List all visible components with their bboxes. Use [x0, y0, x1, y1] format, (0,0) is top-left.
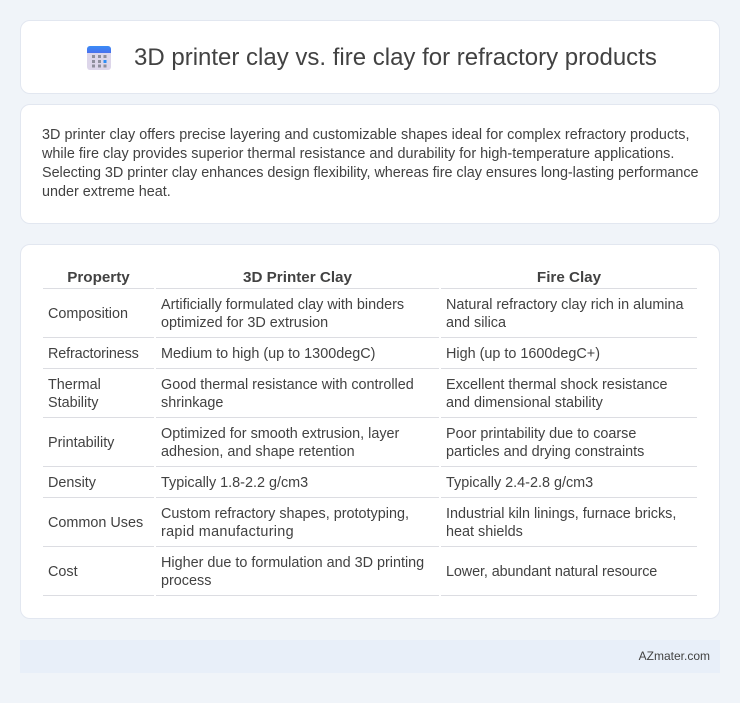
row: thermal stability: shrinkage: [161, 395, 223, 411]
row: common uses: [43, 506, 697, 547]
row: thermal stability: Good thermal resistance with controlled: [161, 377, 414, 393]
row: common uses: Custom refractory shapes, prototyping,: [161, 506, 409, 522]
row: composition: Natural refractory clay rich in alumina: [446, 297, 684, 313]
table header: 3D Printer Clay: [243, 269, 352, 286]
row: common uses: Common Uses: [48, 515, 143, 531]
row: refractoriness: Medium to high (up to 1300degC): [161, 346, 375, 362]
row: thermal stability: [43, 377, 697, 418]
row: composition: Composition: [48, 306, 128, 322]
row: common uses: heat shields: [446, 524, 523, 540]
row: thermal stability: Thermal: [48, 377, 101, 393]
table header: Property: [67, 269, 130, 286]
row: cost: Cost: [48, 564, 78, 580]
row: density: Typically 1.8-2.2 g/cm3: [161, 475, 308, 491]
row: thermal stability: Excellent thermal shock resistance: [446, 377, 668, 393]
row: composition: Artificially formulated clay with binders: [161, 297, 404, 313]
row: printability: Optimized for smooth extrusion, layer: [161, 426, 399, 442]
row: density: Typically 2.4-2.8 g/cm3: [446, 475, 593, 491]
row: printability: [43, 426, 697, 467]
icon: calendar: [87, 46, 111, 70]
row: composition: optimized for 3D extrusion: [161, 315, 328, 331]
intro panel: [20, 104, 720, 224]
row: density: [43, 475, 697, 498]
row: refractoriness: High (up to 1600degC+): [446, 346, 600, 362]
row: cost: Higher due to formulation and 3D printing: [161, 555, 424, 571]
intro text: 3D printer clay offers precise layering and customizable shapes ideal for complex refractory products,: [42, 127, 689, 143]
table header: [43, 269, 697, 289]
comparison table panel: [20, 244, 720, 619]
row: thermal stability: Stability: [48, 395, 98, 411]
row: printability: Printability: [48, 435, 114, 451]
row: cost: process: [161, 573, 211, 589]
row: composition: [43, 297, 697, 338]
footer text: AZmater.com: [639, 649, 710, 663]
row: composition: and silica: [446, 315, 506, 331]
row: printability: particles and drying constraints: [446, 444, 644, 460]
row: cost: Lower, abundant natural resource: [446, 564, 657, 580]
header panel: [20, 20, 720, 94]
row: refractoriness: [43, 346, 697, 369]
intro text: while fire clay provides superior thermal resistance and durability for high-temperature applications.: [42, 146, 674, 162]
row: thermal stability: and dimensional stability: [446, 395, 603, 411]
footer bar: [20, 640, 720, 673]
row: common uses: rapid manufacturing: [161, 524, 294, 540]
row: common uses: Industrial kiln linings, furnace bricks,: [446, 506, 676, 522]
row: cost: [43, 555, 697, 596]
row: printability: adhesion, and shape retention: [161, 444, 355, 460]
row: printability: Poor printability due to coarse: [446, 426, 636, 442]
row: density: Density: [48, 475, 96, 491]
intro text: under extreme heat.: [42, 184, 171, 200]
intro text: Selecting 3D printer clay enhances design flexibility, whereas fire clay ensures long-lasting performance: [42, 165, 698, 181]
table header: Fire Clay: [537, 269, 601, 286]
row: refractoriness: Refractoriness: [48, 346, 139, 362]
title: 3D printer clay vs. fire clay for refractory products: [134, 44, 657, 71]
intro text: [42, 127, 698, 200]
